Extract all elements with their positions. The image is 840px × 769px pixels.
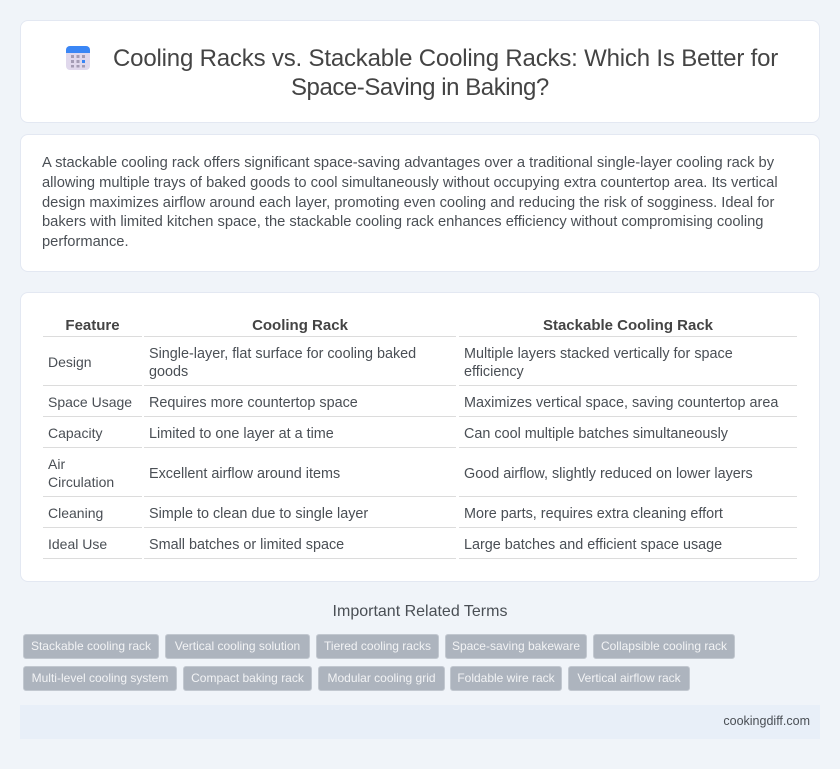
comparison table: Cleaning [48, 505, 103, 521]
comparison table: efficiency [464, 364, 524, 380]
description text: performance. [42, 234, 129, 250]
related term tags: Tiered cooling racks [324, 639, 431, 653]
related term tags: Stackable cooling rack [31, 639, 151, 653]
comparison table: Good airflow, slightly reduced on lower layers [464, 466, 753, 482]
related term tags: Foldable wire rack [457, 671, 555, 685]
footer bar [20, 705, 820, 739]
comparison table: Air [48, 456, 65, 472]
comparison table: Small batches or limited space [149, 537, 344, 553]
description text: allowing multiple trays of baked goods to cool simultaneously without occupying extra countertop area. Its vertical [42, 175, 778, 191]
comparison table [43, 317, 797, 559]
comparison table: Feature [65, 317, 120, 334]
comparison table: Maximizes vertical space, saving countertop area [464, 395, 778, 411]
comparison table: Simple to clean due to single layer [149, 506, 368, 522]
description text: A stackable cooling rack offers significant space-saving advantages over a traditional single-layer cooling rack by [42, 155, 774, 171]
description panel [20, 134, 820, 272]
related term tags: Vertical airflow rack [577, 671, 681, 685]
description text: design maximizes airflow around each layer, promoting even cooling and reducing the risk of sogginess. Ideal for [42, 195, 774, 211]
related term tags [23, 634, 735, 691]
header card [20, 20, 820, 123]
comparison table: Design [48, 354, 92, 370]
related term tags: Multi-level cooling system [32, 671, 168, 685]
comparison table: Excellent airflow around items [149, 466, 340, 482]
comparison table: Stackable Cooling Rack [543, 317, 713, 334]
title: Space-Saving in Baking? [291, 74, 549, 101]
comparison table: Requires more countertop space [149, 395, 358, 411]
title [113, 45, 778, 101]
related terms heading: Important Related Terms [333, 603, 507, 620]
comparison table: Cooling Rack [252, 317, 348, 334]
related term tags: Modular cooling grid [327, 671, 436, 685]
comparison table: Space Usage [48, 394, 132, 410]
footer source: cookingdiff.com [723, 714, 810, 728]
title: Cooling Racks vs. Stackable Cooling Racks: Which Is Better for [113, 45, 778, 72]
comparison table: goods [149, 364, 188, 380]
comparison table: Capacity [48, 425, 102, 441]
related term tags: Vertical cooling solution [175, 639, 300, 653]
description text: bakers with limited kitchen space, the stackable cooling rack enhances efficiency without compromising cooling [42, 214, 763, 230]
comparison table: Large batches and efficient space usage [464, 537, 722, 553]
related term tags: Space-saving bakeware [452, 639, 580, 653]
related term tags: Collapsible cooling rack [601, 639, 727, 653]
comparison table: Single-layer, flat surface for cooling baked [149, 346, 416, 362]
comparison table: Limited to one layer at a time [149, 426, 334, 442]
comparison table: Ideal Use [48, 536, 107, 552]
comparison table: Circulation [48, 474, 114, 490]
comparison table: Multiple layers stacked vertically for space [464, 346, 733, 362]
description text [42, 155, 778, 250]
comparison table panel [20, 292, 820, 582]
icon: calendar [66, 46, 90, 70]
comparison table: Can cool multiple batches simultaneously [464, 426, 728, 442]
related term tags: Compact baking rack [191, 671, 304, 685]
comparison table: More parts, requires extra cleaning effort [464, 506, 723, 522]
